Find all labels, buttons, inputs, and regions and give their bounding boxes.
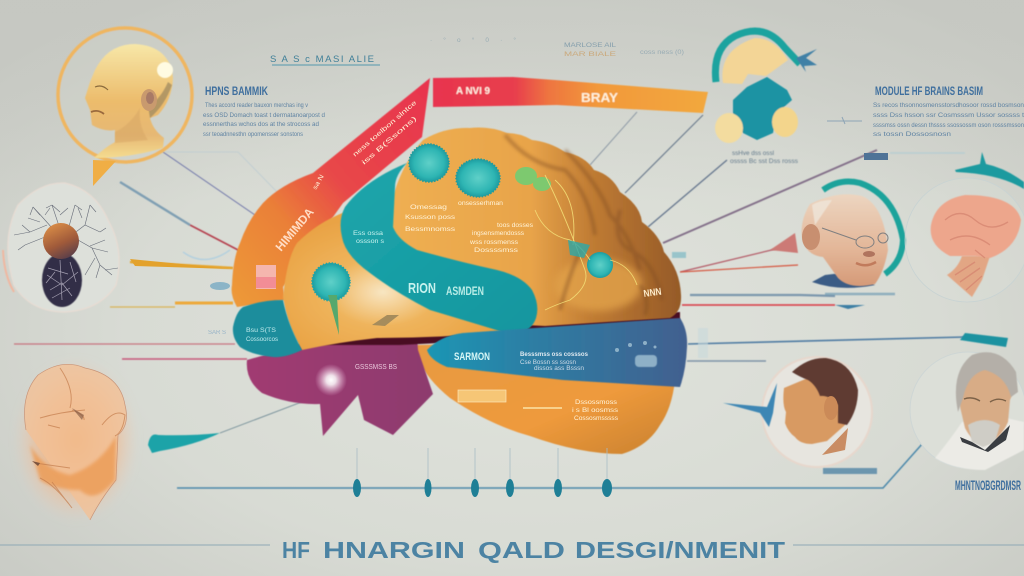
left red-orange lobe	[232, 78, 430, 307]
right text block: Ss recos thsonnosmensstorsdhosoor rossd bosmson	[873, 102, 1024, 109]
brain labels: Cossosmsssss	[574, 415, 619, 422]
brain labels: iss B(Ssons)	[361, 115, 418, 167]
small teal left lobe	[233, 300, 302, 357]
brain labels: Cse Bossn ss ssosn	[520, 360, 576, 366]
brain labels: dissos ass Bsssn	[534, 366, 584, 372]
top faint marks: coss ness (0)	[640, 49, 684, 56]
ribbon label right: BRAY	[581, 90, 618, 105]
teal cell spots	[409, 144, 449, 182]
left text block: Thes accord reader bauxon merchas ing v	[205, 102, 309, 109]
brain labels: RION	[408, 280, 436, 297]
lighter lower-right lobe	[554, 259, 642, 311]
brain labels: toos dosses	[497, 222, 534, 229]
head	[85, 44, 173, 158]
brain labels: ossson s	[356, 239, 384, 245]
left portrait: orange sketched face	[14, 358, 220, 522]
right text block	[827, 84, 1024, 160]
brain labels: ingsensmendosss	[472, 230, 525, 237]
portrait: smiling elderly man with glasses	[802, 182, 903, 288]
dark gap under cortex	[295, 312, 680, 345]
portrait: elderly profile in orange ring	[58, 28, 192, 186]
brain labels: Dossssmss	[474, 247, 519, 254]
portrait: grey-haired bearded man	[910, 352, 1024, 470]
icon: teal arc head diagram: ossss Bc sst Dss rosss	[730, 158, 799, 165]
glow on stem	[315, 364, 347, 396]
portrait: pink brain in circle	[905, 152, 1024, 303]
left portrait: brain tree in bubble	[3, 183, 232, 336]
left portrait: brain tree in bubble: SAR S	[208, 330, 226, 336]
brain labels: Omessag	[410, 204, 447, 211]
brain illustration	[232, 78, 687, 454]
lower orange lobe	[415, 340, 680, 454]
left text block	[203, 84, 325, 138]
blue band	[427, 318, 687, 387]
brain labels: SARMON	[454, 351, 490, 363]
brain labels: sa N	[312, 173, 326, 191]
right text block: ss tossn Dossosnosn	[873, 131, 951, 138]
main title: DESGI/NMENIT	[575, 537, 785, 563]
left text block: essnnerthas wchos dos at the strocoss ad	[203, 121, 319, 128]
brain labels: i s Bl oosmss	[572, 407, 619, 414]
top faint marks: MARLOSE AIL	[564, 42, 616, 49]
left text block: ess OSD Domach toast t dermatanoarpost d	[203, 112, 325, 119]
purple brainstem	[247, 337, 433, 436]
brain labels: GSSSMSS BS	[355, 364, 397, 371]
top faint marks: · ° o ° 0 · °	[430, 36, 520, 44]
teal flower	[312, 263, 350, 335]
right text block: ssss Dss hsson ssr Cosmsssm Ussor sossss t	[873, 112, 1024, 119]
leader lines and connectors	[14, 112, 965, 488]
timeline markers	[353, 448, 612, 497]
brain labels: ASMDEN	[446, 284, 484, 298]
teal S-band	[341, 163, 537, 333]
speech pointer	[93, 160, 116, 186]
brain labels: onsesserhman	[458, 200, 503, 207]
portrait: child in profile	[723, 357, 877, 474]
cortex folds	[505, 135, 662, 315]
brain labels: wss rossmenss	[469, 239, 519, 246]
brain labels: Ksusson poss	[405, 214, 456, 221]
top small heading: S A S c MASI ALIE	[270, 54, 374, 65]
main title	[0, 537, 1024, 563]
top faint marks	[430, 36, 684, 58]
icon: teal arc head diagram	[715, 31, 817, 165]
middle yellow lobe	[283, 212, 505, 350]
brain labels	[246, 99, 662, 422]
ribbon label left: A NVI 9	[456, 86, 490, 97]
left text block: HPNS BAMMIK	[205, 84, 268, 98]
main title: QALD	[478, 537, 565, 563]
top ribbon label band	[433, 77, 708, 113]
brain labels: Dssossmoss	[575, 399, 618, 406]
brain labels: ness toelbon slntce	[352, 99, 419, 159]
neurons	[535, 175, 637, 310]
top faint marks: MAR BIALE	[564, 51, 617, 58]
right side bars	[672, 233, 1008, 358]
teal brush mark	[148, 433, 220, 453]
brain labels: Cossoorcos	[246, 337, 278, 343]
brain labels: Bsu S(TS	[246, 328, 276, 334]
main title: HNARGIN	[323, 537, 465, 563]
main title: HF	[282, 537, 310, 563]
left text block: ssr teoadnnesthn opomensser sonstons	[203, 131, 304, 138]
brain labels: NNN	[643, 287, 662, 300]
brain labels: Besssmss oss cosssos	[520, 351, 588, 358]
cortex	[380, 128, 681, 326]
icon: teal arc head diagram: ssHve dss ossl	[732, 150, 775, 157]
green node	[515, 167, 551, 191]
brain labels: Ess ossa	[353, 231, 384, 237]
brain labels: HIMIMDA	[273, 205, 317, 254]
brain labels: Bessmnomss	[405, 226, 456, 233]
